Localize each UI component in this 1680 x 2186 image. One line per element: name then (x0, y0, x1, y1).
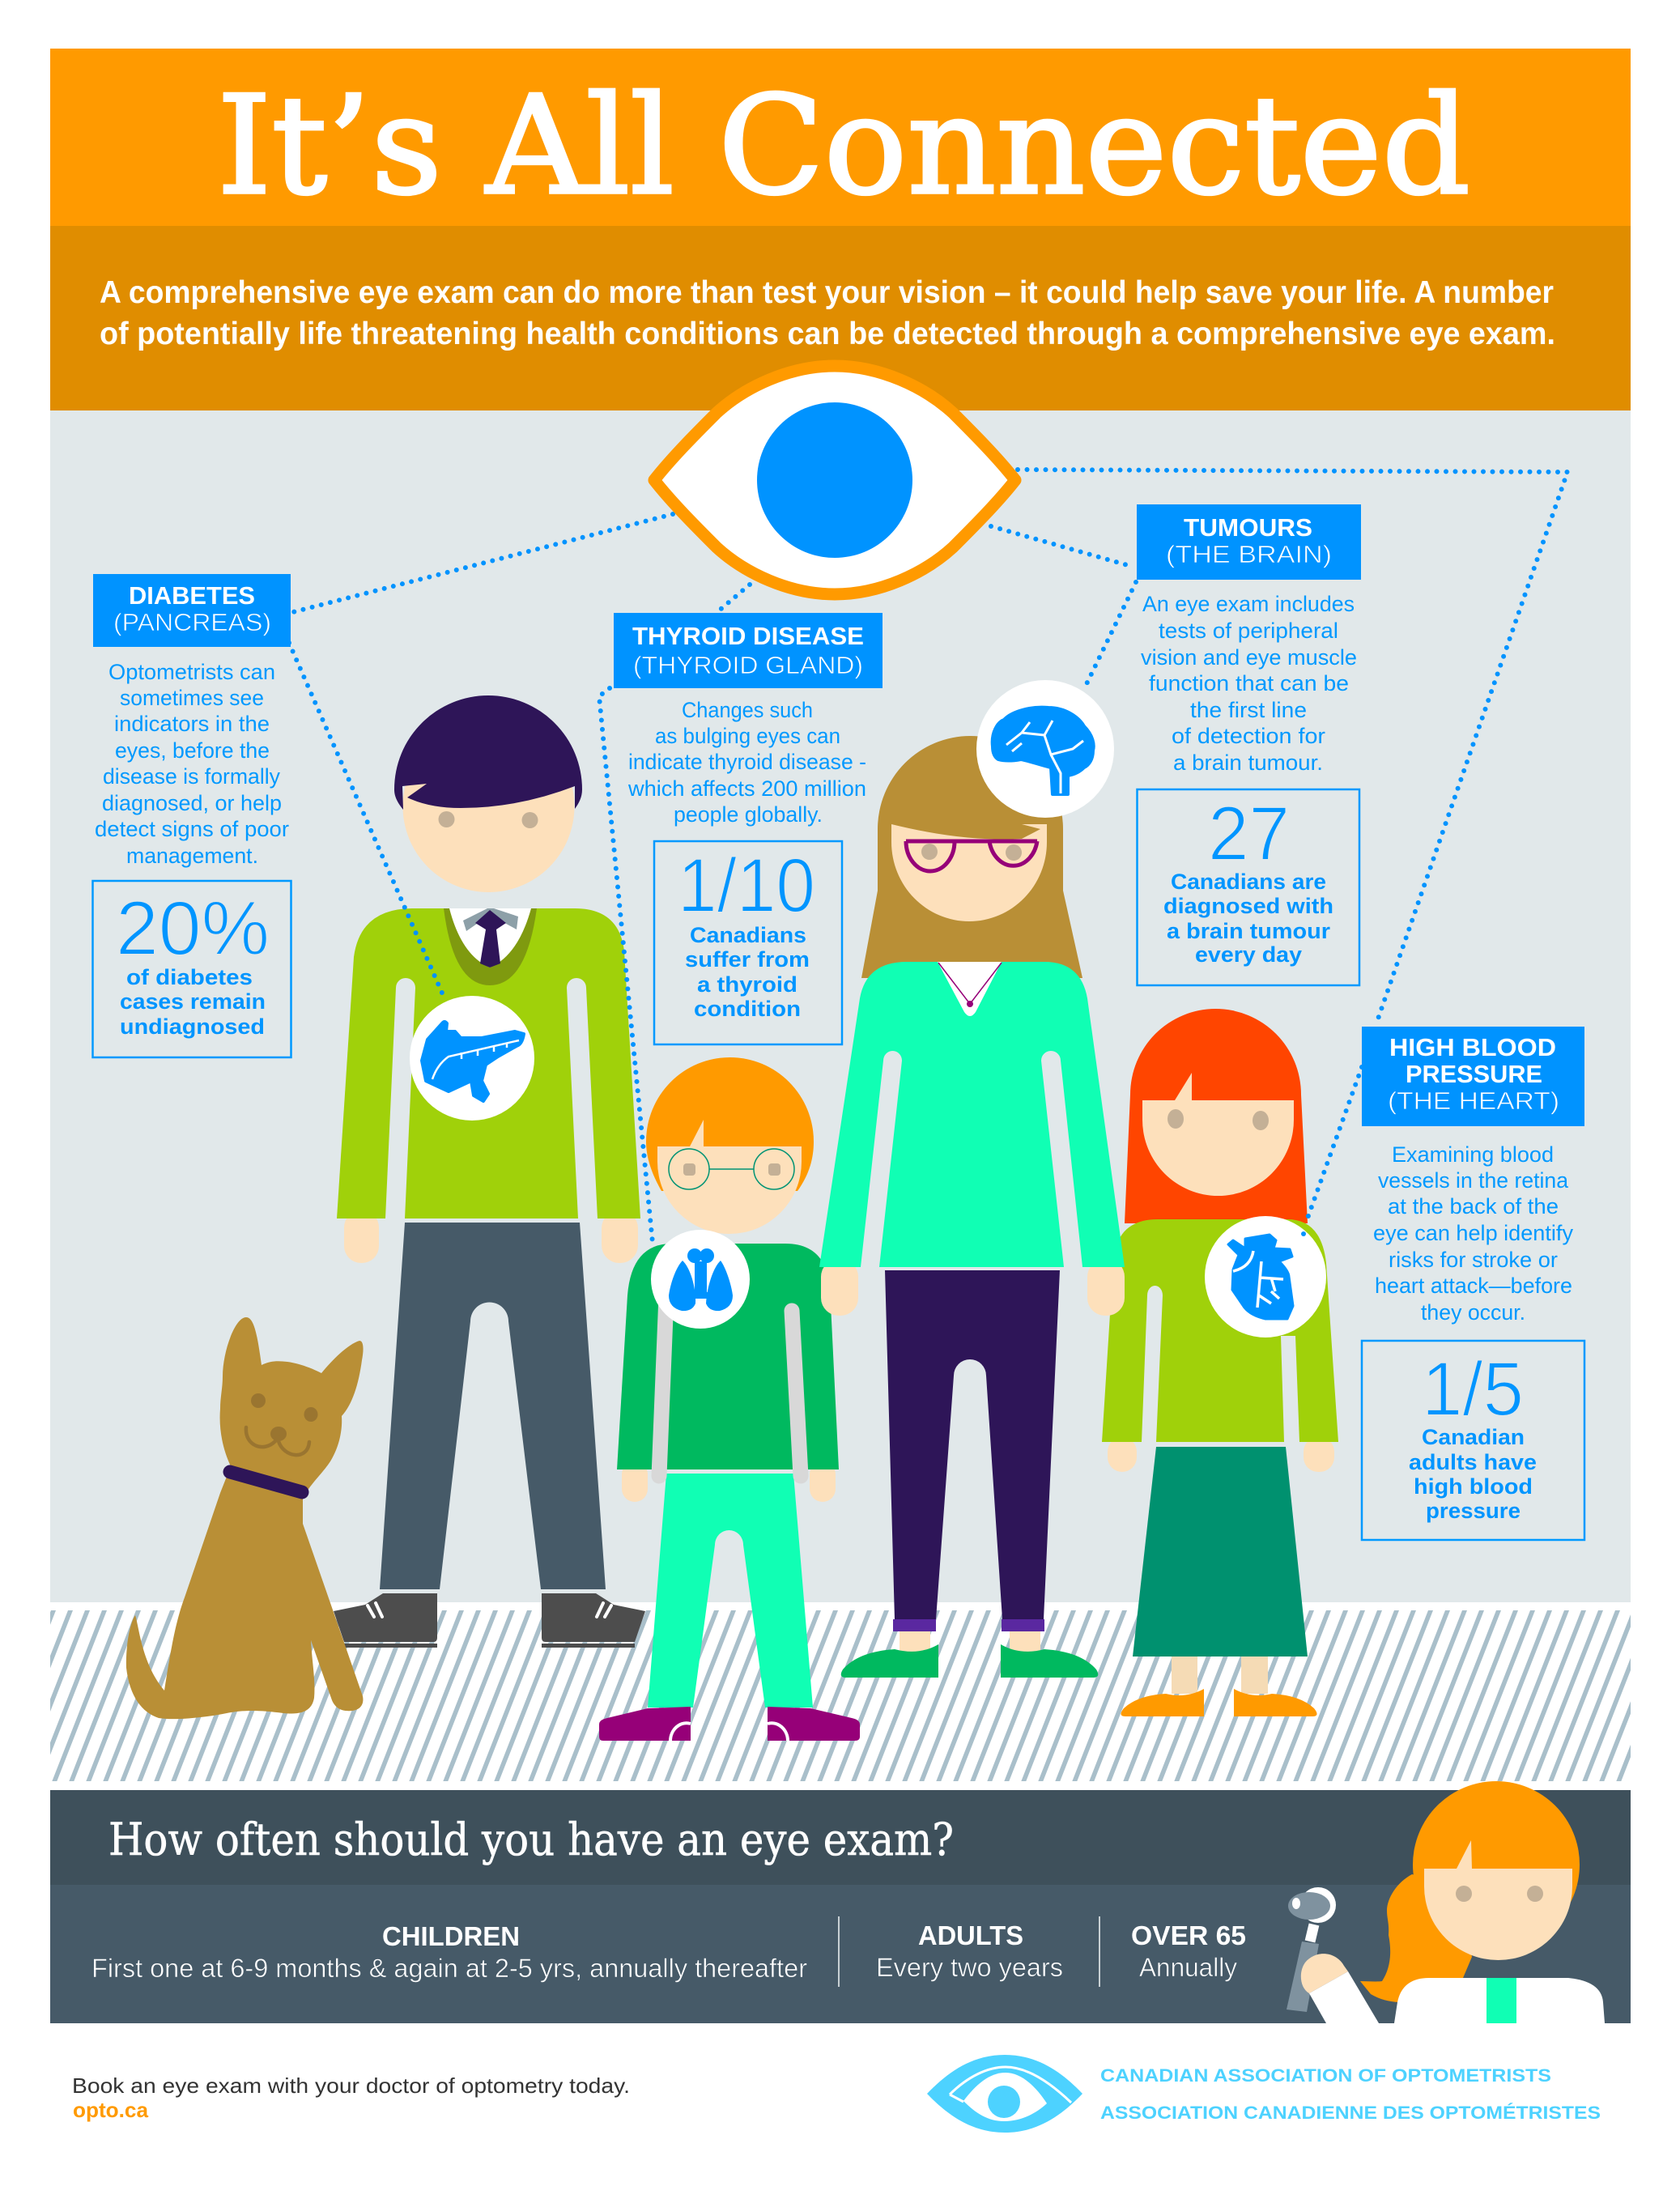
column: over 65: Annually (1139, 1953, 1237, 1982)
intro band (50, 226, 1631, 410)
description: risks for stroke or (1389, 1248, 1558, 1272)
figure: daughter (1102, 1009, 1338, 1716)
description: vessels in the retina (1378, 1168, 1569, 1193)
logo text: CANADIAN ASSOCIATION OF OPTOMETRISTS (1100, 2065, 1551, 2086)
description: vision and eye muscle (1141, 645, 1357, 670)
shoes (1121, 1689, 1204, 1716)
stat box: diagnosed with (1163, 894, 1333, 918)
title banner (50, 49, 1631, 226)
shoes (599, 1707, 691, 1741)
panel: grey background (50, 410, 1631, 1602)
panel: diabetes (92, 574, 291, 1057)
description: An eye exam includes (1142, 592, 1355, 616)
figure: mother (819, 736, 1125, 1678)
column: adults: ADULTS (918, 1920, 1023, 1950)
title: It’s All Connected (217, 66, 1470, 225)
icon: brain in circle (976, 680, 1114, 818)
heading: DIABETES (129, 581, 255, 610)
description: disease is formally (103, 764, 280, 789)
description: function that can be (1149, 671, 1349, 695)
stat box: Canadians are (1171, 870, 1326, 894)
column: over 65: OVER 65 (1131, 1920, 1246, 1950)
shoes (841, 1644, 938, 1678)
stat box: of diabetes (126, 965, 253, 989)
heading: (PANCREAS) (113, 608, 271, 636)
stat box: high blood (1414, 1474, 1533, 1499)
description (95, 660, 289, 868)
stat box: 1/10 (678, 843, 815, 929)
description: a brain tumour. (1173, 751, 1323, 775)
stat box: 20% (116, 886, 270, 972)
column: adults: Every two years (876, 1953, 1063, 1982)
call to action: Book an eye exam with your doctor of optometry today. (72, 2073, 630, 2098)
logo: ASSOCIATION CANADIENNE DES OPTOMÉTRISTES (1100, 2103, 1601, 2123)
icon: pancreas in circle (410, 996, 534, 1121)
stat box: Canadians (690, 923, 806, 947)
heading: THYROID DISEASE (632, 622, 864, 650)
description: diagnosed, or help (102, 791, 282, 815)
intro text: of potentially life threatening health conditions can be detected through a comprehensive eye exam. (100, 317, 1555, 351)
column: adults (876, 1920, 1063, 1982)
description: detect signs of poor (95, 817, 289, 841)
stat box: 27 (1208, 791, 1290, 877)
icon: heart in circle (1205, 1216, 1326, 1338)
stat box: every day (1195, 942, 1302, 967)
stat box: pressure (1426, 1499, 1521, 1523)
stat box (654, 841, 842, 1044)
figure: dog (126, 1317, 364, 1719)
logo eye (927, 2055, 1082, 2133)
collar (230, 1472, 302, 1492)
logo (927, 2055, 1601, 2133)
call to action (72, 2073, 630, 2122)
heading: (THE BRAIN) (1166, 540, 1332, 568)
description: eyes, before the (115, 738, 270, 763)
heading: (THYROID GLAND) (633, 651, 863, 679)
glasses (906, 841, 1037, 871)
call to action: opto.ca (73, 2098, 149, 2122)
heading (1362, 1027, 1584, 1126)
column: over 65 (1131, 1920, 1246, 1982)
description: Examining blood (1392, 1142, 1554, 1167)
description: eye can help identify (1373, 1221, 1573, 1245)
v-neck and tie (444, 908, 537, 985)
neckline and necklace (938, 962, 1002, 1016)
description: they occur. (1421, 1300, 1525, 1325)
description: which affects 200 million (627, 776, 866, 801)
striped floor (50, 1602, 1631, 1790)
stat box: adults have (1409, 1450, 1537, 1474)
description: people globally. (674, 802, 823, 827)
description: indicators in the (114, 712, 270, 736)
stat box (1137, 789, 1359, 985)
arm and hand (1301, 1954, 1348, 1993)
description: management. (126, 844, 258, 868)
figure: son (599, 1057, 860, 1741)
glasses (669, 1149, 794, 1189)
panel: tumours (1137, 504, 1361, 985)
description: sometimes see (120, 686, 264, 710)
stat box: cases remain (120, 989, 266, 1014)
stat box (92, 881, 291, 1057)
coat (1394, 1978, 1605, 2023)
description: the first line (1190, 698, 1307, 722)
description: tests of peripheral (1159, 619, 1338, 643)
description (1141, 592, 1357, 775)
intro text (100, 275, 1555, 351)
heading (1137, 504, 1361, 580)
figure: father (334, 695, 645, 1648)
description (1373, 1142, 1573, 1325)
frequency heading: How often should you have an eye exam? (108, 1814, 954, 1865)
icon: thyroid in circle (651, 1230, 750, 1329)
intro text: A comprehensive eye exam can do more than test your vision – it could help save your life. A number (100, 275, 1554, 310)
panel: high blood pressure (1362, 1027, 1584, 1540)
stat box: a brain tumour (1167, 919, 1331, 943)
column: children: First one at 6-9 months & again at 2-5 yrs, annually thereafter (91, 1954, 807, 1983)
stat box: 1/5 (1422, 1346, 1524, 1432)
shoes (334, 1593, 437, 1648)
description: heart attack—before (1375, 1274, 1572, 1298)
column: children: CHILDREN (382, 1921, 520, 1951)
icon: large eye (654, 366, 1015, 594)
heading: PRESSURE (1406, 1060, 1542, 1088)
heading: (THE HEART) (1388, 1087, 1559, 1115)
description: as bulging eyes can (655, 724, 840, 748)
heading: TUMOURS (1184, 513, 1312, 542)
stat box: a thyroid (697, 972, 797, 997)
pupil (757, 402, 912, 558)
stat box: Canadian (1422, 1425, 1525, 1449)
stat box: undiagnosed (120, 1014, 265, 1039)
description: Changes such (682, 698, 813, 722)
heading (614, 613, 883, 688)
stat box (1362, 1341, 1584, 1540)
heading: HIGH BLOOD (1389, 1033, 1556, 1061)
description: at the back of the (1388, 1194, 1559, 1218)
description: Optometrists can (108, 660, 275, 684)
figure: optometrist (1287, 1781, 1605, 2023)
stat box: condition (694, 997, 801, 1021)
panel: thyroid disease (614, 613, 883, 1044)
panel: exam frequency (50, 1790, 1631, 2023)
dotted connector lines (289, 470, 1567, 1243)
description: of detection for (1172, 724, 1325, 748)
column: children (91, 1921, 807, 1983)
description: indicate thyroid disease - (628, 750, 866, 774)
ophthalmoscope (1287, 1887, 1336, 2012)
heading (93, 574, 291, 647)
description (627, 698, 866, 827)
stat box: suffer from (685, 947, 810, 972)
